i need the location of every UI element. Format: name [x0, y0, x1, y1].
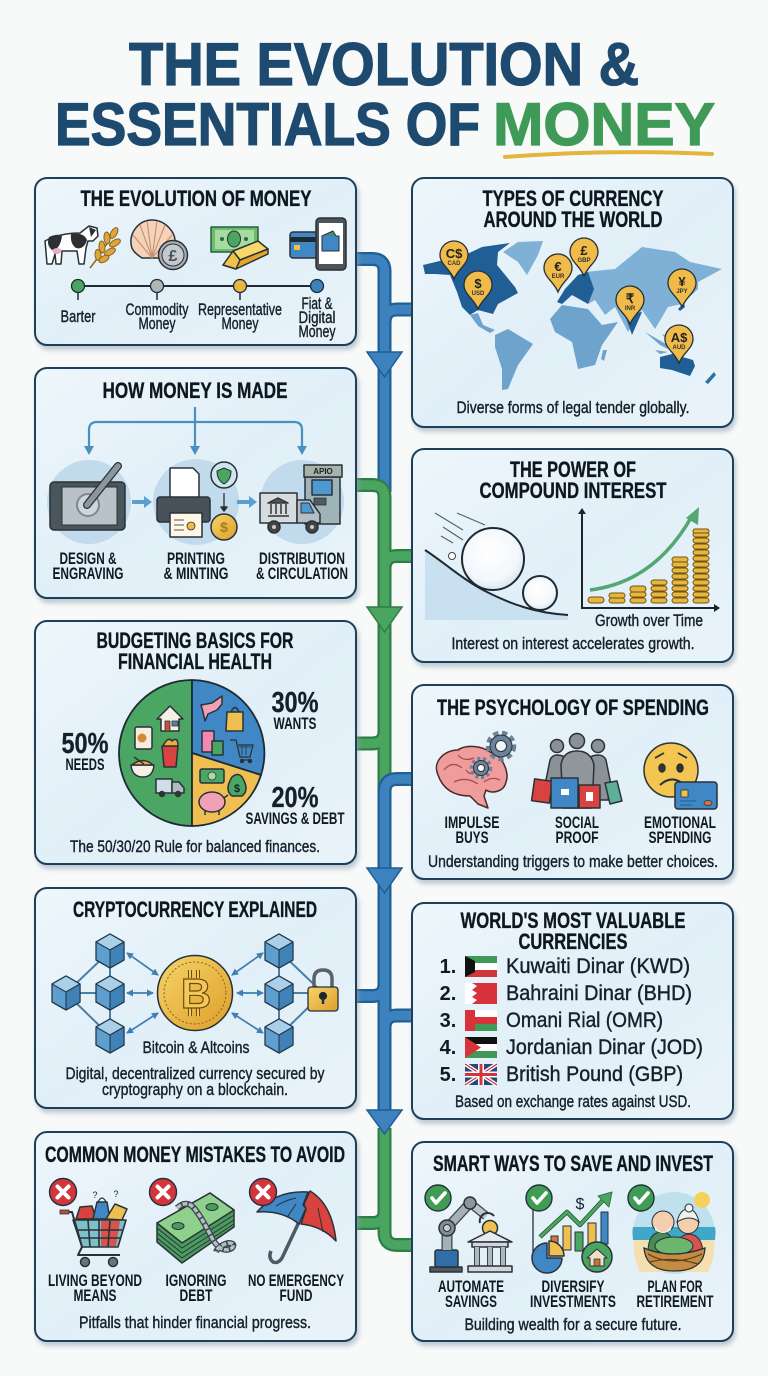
step labels: PRINTING [167, 550, 225, 568]
heading: CURRENCIES [518, 929, 628, 954]
timeline labels [60, 295, 336, 341]
map pin: $: USD [472, 291, 485, 297]
timeline [72, 280, 324, 300]
heading: THE EVOLUTION OF MONEY [80, 186, 312, 211]
icon: cow and wheat [45, 226, 122, 268]
icon: printer and coin [157, 462, 237, 540]
row 5: British Pound: British Pound (GBP) [506, 1063, 683, 1086]
step labels [52, 550, 348, 583]
caption: Building wealth for a secure future. [464, 1316, 682, 1334]
timeline labels: Representative [198, 301, 282, 319]
pie labels: 20 savings: SAVINGS & DEBT [246, 810, 344, 828]
map pin: pound: GBP [577, 258, 591, 264]
labels: SOCIAL [555, 814, 599, 832]
icon: rising investment chart [532, 1192, 612, 1273]
map pin: C$: C$ [446, 246, 463, 261]
row 2: Bahraini Dinar: Bahraini Dinar (BHD) [506, 982, 692, 1005]
map pin: euro: EUR [552, 274, 565, 280]
map pin: euro: € [554, 259, 562, 274]
world map [423, 241, 722, 390]
labels: LIVING BEYOND [48, 1272, 142, 1290]
step labels: & CIRCULATION [256, 565, 348, 583]
icon: bitcoin coin: B [181, 970, 211, 1017]
icon: robot arm and bank [430, 1197, 512, 1272]
icon: truck and ATM: APIO [313, 467, 333, 476]
timeline labels: Commodity [126, 301, 189, 319]
labels: EMOTIONAL [644, 814, 716, 832]
row 4: Jordanian Dinar: 4. [440, 1037, 456, 1059]
flag: United Kingdom [465, 1064, 497, 1085]
icons in savings slice [199, 769, 246, 815]
panel: budgeting basics [35, 621, 356, 864]
labels: SAVINGS [445, 1293, 497, 1311]
pie chart: 50/30/20 [119, 680, 264, 826]
branching arrows [84, 407, 307, 455]
heading: BUDGETING BASICS FOR [96, 628, 294, 653]
map pin: pound: £ [580, 243, 588, 258]
pie labels: 20 savings [246, 782, 344, 828]
row 1: Kuwaiti Dinar: 1. [440, 956, 456, 978]
labels: AUTOMATE [438, 1278, 504, 1296]
icon: retired couple in nest [632, 1192, 716, 1274]
icon: group of shoppers [532, 734, 622, 808]
timeline labels: Fiat & [302, 295, 332, 313]
icon: card and phone wallet [290, 218, 346, 270]
flag: Oman [465, 1010, 497, 1031]
icon: truck and ATM [260, 465, 342, 533]
labels: FUND [280, 1287, 313, 1305]
row 1: Kuwaiti Dinar: Kuwaiti Dinar (KWD) [506, 955, 690, 978]
heading: WORLD'S MOST VALUABLE [460, 908, 686, 933]
caption: The 50/30/20 Rule for balanced finances. [70, 838, 320, 856]
row 3: Omani Rial: 3. [440, 1010, 456, 1032]
flag: Kuwait [465, 956, 497, 977]
title: MONEY [493, 91, 715, 158]
pie labels: 20 savings: 20% [272, 782, 319, 814]
map pin: rupee: ₹ [626, 291, 635, 306]
flag: Bahrain [465, 983, 497, 1004]
icons in wants slice [201, 696, 253, 762]
blockchain cubes [52, 934, 293, 1053]
icon: rising investment chart: $ [576, 1196, 585, 1213]
labels [444, 814, 716, 847]
caption: Pitfalls that hinder financial progress. [79, 1314, 311, 1332]
caption: Understanding triggers to make better choices. [428, 853, 718, 871]
icon: overloaded shopping cart: ? [92, 1190, 98, 1200]
icon: printer and coin: $ [220, 519, 228, 535]
icon: overloaded shopping cart: ? [113, 1189, 119, 1199]
pie labels: 50 needs: NEEDS [66, 756, 104, 774]
row 5: British Pound [440, 1063, 683, 1086]
icon: shell and coin: £ [169, 248, 178, 265]
labels: INVESTMENTS [530, 1293, 616, 1311]
icons in needs slice [131, 706, 184, 796]
icon: worried face and credit card [644, 743, 717, 809]
panel: how money is made [35, 368, 356, 598]
title [55, 31, 715, 158]
heading: TYPES OF CURRENCY [482, 186, 664, 211]
icon: shell and coin [131, 220, 188, 270]
step labels: & MINTING [164, 565, 228, 583]
small process arrows [132, 496, 257, 508]
connector: green flow to mistakes and saving [356, 1110, 412, 1245]
map pin: australian dollar: A$ [671, 330, 688, 345]
pie labels: 50 needs [62, 728, 109, 774]
pie labels: 50 needs: 50% [62, 728, 109, 760]
step labels: DESIGN & [60, 550, 117, 568]
heading: CRYPTOCURRENCY EXPLAINED [73, 897, 317, 922]
map pin: rupee [616, 286, 644, 324]
icon: bitcoin coin [158, 956, 232, 1030]
timeline labels: Barter [60, 308, 96, 326]
labels: NO EMERGENCY [248, 1272, 344, 1290]
row 3: Omani Rial [440, 1009, 663, 1032]
labels [438, 1278, 714, 1311]
timeline labels: Money [222, 315, 259, 333]
icon: red x [250, 1178, 276, 1206]
network links [66, 951, 323, 1036]
labels: PROOF [556, 829, 598, 847]
icon: torn umbrella [257, 1191, 336, 1262]
labels: DEBT [180, 1287, 212, 1305]
heading: THE POWER OF [510, 457, 636, 482]
caption: cryptography on a blockchain. [102, 1081, 288, 1099]
flag: Jordan [465, 1037, 497, 1058]
row 2: Bahraini Dinar: 2. [440, 983, 456, 1005]
map pin: rupee: INR [625, 306, 636, 312]
icon: brain and gears [436, 734, 514, 808]
heading: HOW MONEY IS MADE [102, 378, 288, 403]
row 3: Omani Rial: Omani Rial (OMR) [506, 1009, 663, 1032]
map pin: yen: JPY [676, 289, 688, 295]
labels: RETIREMENT [636, 1293, 714, 1311]
icon: banknotes and chain [157, 1193, 234, 1263]
map pin: euro [544, 254, 572, 292]
map pin: pound [570, 238, 598, 276]
icon: padlock [308, 970, 338, 1011]
icon: green check [628, 1185, 654, 1211]
panel: smart ways to save [412, 1142, 733, 1341]
icon: tablet and pen [50, 466, 125, 530]
title: THE EVOLUTION & [129, 31, 639, 98]
panel: compound interest [412, 449, 733, 662]
labels: MEANS [74, 1287, 116, 1305]
heading: COMMON MONEY MISTAKES TO AVOID [45, 1142, 345, 1167]
map pin: $: $ [474, 276, 482, 291]
timeline labels: Money [138, 315, 176, 333]
chart: growth over time [578, 507, 720, 612]
connector: green flow from how money is made to budgeting [356, 485, 412, 790]
map pin: australian dollar: AUD [672, 345, 686, 351]
title: ESSENTIALS OF [55, 91, 480, 158]
caption: Diverse forms of legal tender globally. [456, 399, 690, 417]
map pin: yen: ¥ [678, 274, 686, 289]
panel: most valuable currencies [412, 903, 733, 1119]
step circles [47, 459, 344, 545]
step labels: DISTRIBUTION [259, 550, 345, 568]
row 4: Jordanian Dinar: Jordanian Dinar (JOD) [506, 1036, 703, 1059]
pie labels: 30 wants: 30% [272, 687, 319, 719]
labels: PLAN FOR [648, 1278, 703, 1296]
icons in savings slice: $ [234, 783, 240, 795]
illustration: snowball on slope [425, 513, 568, 620]
timeline labels: Digital [298, 309, 336, 327]
heading [482, 186, 664, 232]
double-headed arrows [127, 953, 263, 1033]
icon: banknote and gold bar [211, 227, 268, 269]
coin label: Bitcoin & Altcoins [142, 1039, 250, 1057]
heading: COMPOUND INTEREST [480, 478, 667, 503]
labels: DIVERSIFY [542, 1278, 604, 1296]
panel: psychology of spending [412, 685, 733, 879]
map pin: C$: CAD [448, 261, 461, 267]
panel: the evolution of money [35, 178, 356, 345]
panel: common money mistakes [35, 1132, 356, 1341]
icon: red x [150, 1178, 176, 1206]
caption: Based on exchange rates against USD. [455, 1093, 691, 1111]
caption: Interest on interest accelerates growth. [452, 635, 694, 653]
icon: green check [526, 1185, 552, 1211]
caption: Digital, decentralized currency secured by [66, 1065, 325, 1083]
panel: types of currency [412, 178, 733, 427]
heading: AROUND THE WORLD [484, 207, 662, 232]
step labels: ENGRAVING [52, 565, 124, 583]
chart label: Growth over Time [595, 612, 703, 630]
map pin: yen [668, 269, 696, 307]
heading [96, 628, 294, 674]
heading [480, 457, 667, 503]
labels [48, 1272, 344, 1305]
labels: SPENDING [648, 829, 712, 847]
labels: IGNORING [166, 1272, 226, 1290]
map pin: $ [464, 271, 492, 309]
icon: overloaded shopping cart [60, 1189, 127, 1266]
timeline labels: Money [298, 323, 336, 341]
labels: IMPULSE [444, 814, 500, 832]
caption [66, 1065, 325, 1099]
icon: red x [50, 1178, 76, 1206]
heading [460, 908, 686, 954]
labels: BUYS [456, 829, 488, 847]
heading: FINANCIAL HEALTH [118, 649, 272, 674]
pie labels: 30 wants: WANTS [274, 715, 316, 733]
panel: cryptocurrency explained [35, 888, 356, 1108]
connector: blue flow from psychology to crypto [356, 779, 412, 1118]
map pin: C$ [440, 241, 468, 279]
map pin: australian dollar [665, 325, 693, 363]
icon: green check [425, 1185, 451, 1211]
connector: blue flow from evolution to how money is made [356, 259, 412, 492]
pie labels: 30 wants [272, 687, 319, 733]
row 5: British Pound: 5. [440, 1064, 456, 1086]
